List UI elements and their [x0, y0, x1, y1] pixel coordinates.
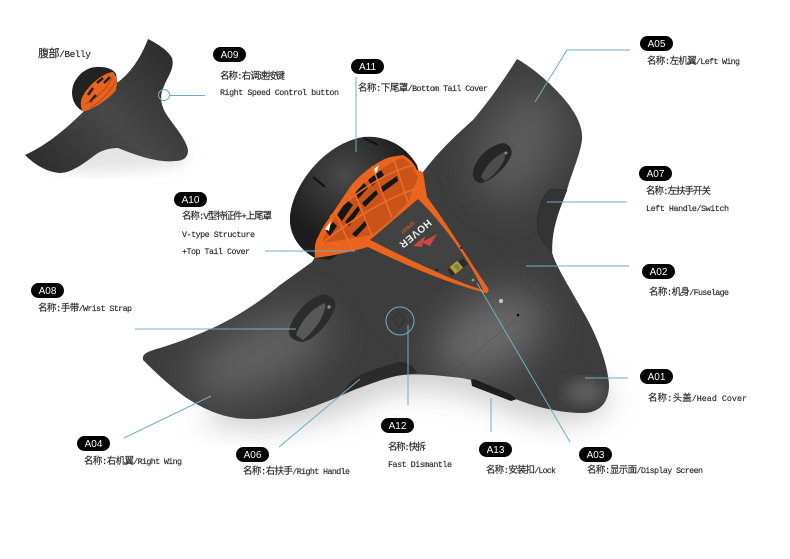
callout A09: Right Speed Control button	[220, 88, 339, 98]
grille dark openings	[326, 170, 398, 237]
callout A04: 名称:右机翼/Right Wing	[84, 455, 182, 467]
callout A07	[639, 166, 729, 214]
left wrist strap	[473, 143, 512, 183]
callout A09: 名称:右调速按键	[220, 70, 285, 82]
callout A11: A11	[359, 62, 376, 73]
left handle	[537, 189, 567, 252]
leader lines	[124, 50, 630, 447]
callout A13: 名称:安装扣/Lock	[486, 464, 556, 476]
display panel	[370, 199, 519, 316]
body and wings	[130, 50, 620, 425]
fan housing	[290, 137, 425, 260]
logo: HOVER	[396, 217, 433, 250]
callout A09: A09	[221, 50, 239, 61]
callout A10: 名称:V型特征件+上尾罩	[182, 210, 272, 222]
scooter main body	[130, 50, 620, 425]
callout A10	[174, 192, 272, 257]
main scooter shadow	[200, 345, 612, 429]
callout A10: +Top Tail Cover	[182, 247, 250, 257]
callout A12: A12	[389, 421, 407, 432]
callout A01: 名称:头盖/Head Cover	[648, 392, 747, 404]
callout A09	[213, 47, 339, 98]
housing slots	[313, 138, 378, 187]
belly fan housing	[72, 67, 118, 112]
callout A08	[31, 283, 132, 314]
callout A10: A10	[182, 195, 200, 206]
callout A12	[381, 418, 452, 470]
right handle	[345, 362, 417, 393]
belly view of the scooter	[25, 39, 190, 173]
callout A11	[351, 59, 488, 94]
callout A05: 名称:左机翼/Left Wing	[647, 55, 740, 67]
orange grille and V structure	[315, 155, 489, 293]
callout A01	[640, 369, 747, 404]
callout A07: A07	[647, 169, 665, 180]
callout A02	[642, 264, 729, 298]
callout A10: V-type Structure	[182, 230, 255, 240]
title: belly: 腹部/Belly	[38, 46, 91, 61]
screen	[447, 258, 468, 276]
callout A05	[640, 36, 740, 67]
logo: SPRAY	[398, 219, 416, 235]
callout A05: A05	[648, 39, 666, 50]
callout A03	[579, 447, 703, 476]
callout A02: 名称:机身/Fuselage	[649, 286, 729, 298]
callout A11: 名称:下尾罩/Bottom Tail Cover	[358, 82, 488, 94]
callout A08: 名称:手带/Wrist Strap	[38, 302, 132, 314]
callout A13: A13	[487, 445, 505, 456]
callout A03: 名称:显示面/Display Screen	[587, 464, 703, 476]
callout A03: A03	[587, 450, 605, 461]
callout A13	[479, 442, 556, 476]
grille ribs	[322, 157, 418, 250]
callout A07: 名称:左扶手开关	[646, 185, 711, 197]
callout A12: 名称:快拆	[388, 441, 426, 453]
callout A06: A06	[244, 450, 262, 461]
callout A04: A04	[85, 439, 103, 450]
white gaps in grille	[325, 165, 379, 231]
grille base	[315, 155, 489, 293]
quick release tab	[392, 313, 405, 327]
callout A06: 名称:右扶手/Right Handle	[243, 465, 350, 477]
callout A07: Left Handle/Switch	[646, 204, 729, 214]
callout A12: Fast Dismantle	[388, 460, 452, 470]
callout A04	[77, 436, 182, 467]
lock clip	[471, 379, 517, 401]
callout A08: A08	[39, 286, 57, 297]
callout A02: A02	[650, 267, 668, 278]
callout A01: A01	[648, 372, 666, 383]
right wrist strap	[289, 294, 336, 342]
callout A06	[236, 447, 350, 477]
belly orange grille	[81, 72, 117, 112]
inner recess	[322, 158, 418, 243]
